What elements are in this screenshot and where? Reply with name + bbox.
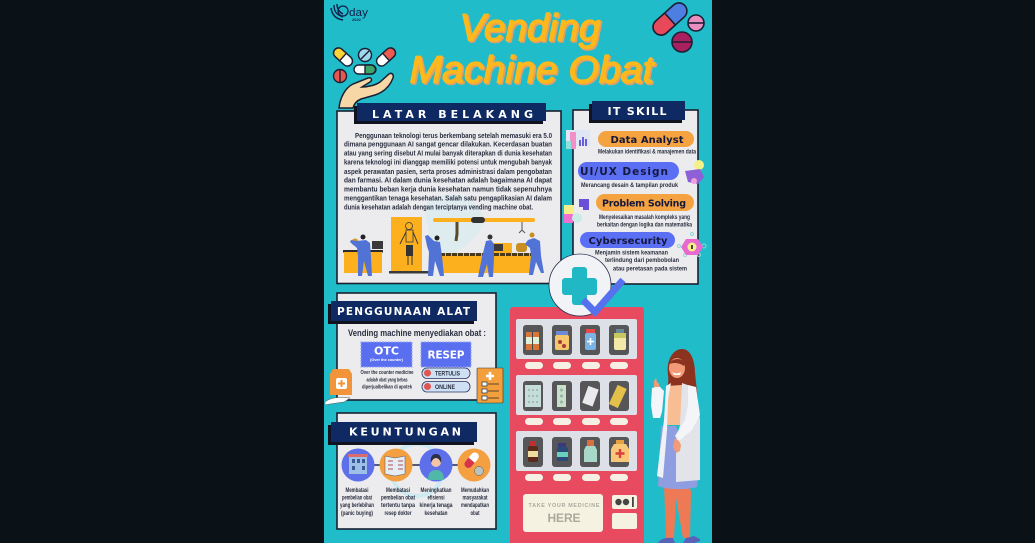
icon: security hexagon (678, 232, 706, 256)
buttons under shelves (525, 362, 628, 481)
benefit: panic buying (340, 448, 374, 517)
title: Vending (460, 8, 600, 50)
text block: latar belakang body: aspek perawatan pasien, serta proses administrasi dalam pengobatan (344, 167, 552, 176)
badge: OTC (361, 342, 412, 367)
benefit: access: obat (470, 510, 480, 517)
illustration: factory workers (343, 217, 544, 277)
panel: penggunaan alat (328, 293, 496, 400)
logo: today 2022: 2022 (352, 17, 362, 22)
panel: IT skill (573, 101, 698, 284)
benefit: prescription: resep dokter (384, 510, 412, 517)
panel: latar belakang (337, 103, 561, 284)
icon: design shapes (685, 160, 704, 184)
skill: Data Analyst: Data Analyst (610, 135, 684, 146)
skill: Problem Solving: berkaitan dengan logika dan matematika (597, 222, 692, 228)
skill: UI/UX Design: UI/UX Design (580, 166, 668, 178)
button: tertulis: TERTULIS (435, 370, 461, 378)
benefit: prescription (380, 448, 416, 517)
skill: Cybersecurity: Menjamin sistem keamanan (595, 250, 668, 256)
medicines: bottom row (528, 440, 629, 462)
heading: penggunaan alat (328, 301, 477, 324)
text: vending intro: Vending machine menyediakan obat : (348, 328, 486, 338)
skill: Problem Solving: Problem Solving (602, 198, 686, 210)
benefit: prescription: Membatasi (386, 487, 410, 494)
text block: latar belakang body: karena teknologi ini dianggap memiliki potensi untuk mengubah banyak (344, 158, 553, 166)
pickup tray: HERE (548, 511, 580, 525)
text block: latar belakang body: membantu beban kerja dunia kesehatan namun tidak sepenuhnya (344, 184, 553, 194)
text: OTC description: Over the counter medicine (360, 370, 414, 376)
badge: RESEP (421, 342, 471, 367)
skill: Cybersecurity: atau peretasan pada sistem (613, 266, 687, 272)
benefit: panic buying: pembelian obat (342, 494, 373, 502)
vending machine (510, 307, 644, 543)
heading: IT skill: IT SKILL (608, 105, 666, 118)
figure: pharmacist (651, 349, 700, 543)
badge: OTC: OTC (374, 344, 399, 358)
heading: keuntungan: KEUNTUNGAN (349, 426, 461, 438)
icon: capsule and tablets top right (650, 0, 704, 52)
text block: latar belakang body: menggantikan tenaga kesehatan. Salah satu pengaplikasian AI dalam (344, 194, 552, 202)
skill: UI/UX Design (578, 162, 679, 189)
skill: Cybersecurity (580, 232, 687, 272)
icon: pills above hand (331, 46, 398, 82)
logo: today 2022 (331, 4, 369, 22)
text block: latar belakang body: Penggunaan teknologi terus berkembang setelah memasuki era 5.0 (355, 131, 552, 140)
skill: Cybersecurity: terlindung dari pembobolan (605, 257, 679, 264)
coin slot (612, 495, 637, 509)
product slots (523, 325, 629, 467)
benefit: panic buying: Membatasi (346, 487, 369, 494)
poster background (324, 0, 712, 543)
panel: keuntungan (328, 413, 496, 529)
change tray (612, 513, 637, 529)
skill: Problem Solving (596, 194, 694, 228)
benefit: efficiency: kesehatan (424, 510, 448, 517)
pickup tray: TAKE YOUR MEDICINE (528, 503, 600, 509)
benefit: access (458, 448, 490, 517)
benefit: access: Memudahkan (461, 487, 489, 494)
heading: latar belakang (354, 103, 546, 124)
heading: IT skill (589, 101, 685, 123)
benefit: prescription: pembelian obat (381, 494, 416, 502)
button: online (422, 382, 470, 392)
benefit: efficiency: Meningkatkan (420, 487, 452, 494)
heading: penggunaan alat: PENGGUNAAN ALAT (337, 306, 471, 318)
skill: UI/UX Design: Merancang desain & tampilan produk (581, 182, 678, 189)
pickup tray (523, 494, 603, 532)
skill: Data Analyst: Melakukan identifikasi & manajemen data (598, 148, 696, 156)
badge: RESEP: RESEP (428, 350, 465, 362)
title: Machine Obat (410, 50, 655, 92)
benefit: panic buying: yang berlebihan (340, 502, 374, 509)
watermark (426, 195, 483, 257)
icon: medical cross with check (549, 254, 623, 316)
title: Vending (461, 9, 602, 51)
skill: Cybersecurity: Cybersecurity (588, 236, 668, 247)
text: OTC description (360, 370, 414, 390)
text block: latar belakang body: dunia kesehatan adalah dengan terciptanya vending machine obat. (344, 202, 533, 212)
heading: keuntungan (328, 422, 477, 445)
title (410, 8, 656, 93)
icon: orange checklist clipboard (477, 368, 503, 403)
button: online: ONLINE (435, 384, 456, 391)
text: OTC description: adalah obat yang bebas (366, 378, 408, 384)
skill: Data Analyst (598, 131, 696, 156)
benefit: efficiency (420, 448, 453, 517)
icon: puzzle (564, 199, 589, 223)
benefit: access: mendapatkan (461, 502, 489, 509)
logo: today 2022: day (349, 7, 369, 19)
benefit: panic buying: (panic buying) (341, 510, 373, 517)
text block: latar belakang body: dan farmasi. AI dalam dunia kesehatan adalah bagaimana AI dapat (344, 176, 552, 184)
text block: latar belakang body (344, 131, 553, 212)
benefit: prescription: tertentu tanpa (381, 502, 415, 509)
badge: OTC: (Over the counter) (370, 358, 404, 362)
medicines: middle row (525, 385, 627, 408)
benefit: efficiency: kinerja tenaga (420, 502, 453, 509)
icon: medicine bag and hand (325, 369, 352, 405)
title: Machine Obat (411, 51, 656, 93)
watermark (391, 444, 443, 496)
icon: data chart (566, 130, 590, 149)
text: OTC description: diperjualbelikan di apotek (362, 384, 412, 390)
icon: hand (339, 73, 393, 108)
heading: latar belakang: LATAR BELAKANG (372, 108, 533, 121)
medicines: top row (526, 329, 626, 350)
skill: Problem Solving: Menyelesaikan masalah kompleks yang (599, 214, 690, 221)
text block: latar belakang body: atau yang sering disebut AI mulai banyak diterapkan di dunia kesehatan (344, 148, 552, 158)
text block: latar belakang body: dimana penggunaan AI sangat gencar dilakukan. Kecerdasan buatan (344, 140, 552, 148)
button: tertulis (422, 368, 470, 378)
shelf rows (516, 319, 637, 471)
benefit: access: masyarakat (462, 494, 488, 502)
connector line (358, 464, 474, 466)
benefit: efficiency: efisiensi (428, 494, 445, 502)
